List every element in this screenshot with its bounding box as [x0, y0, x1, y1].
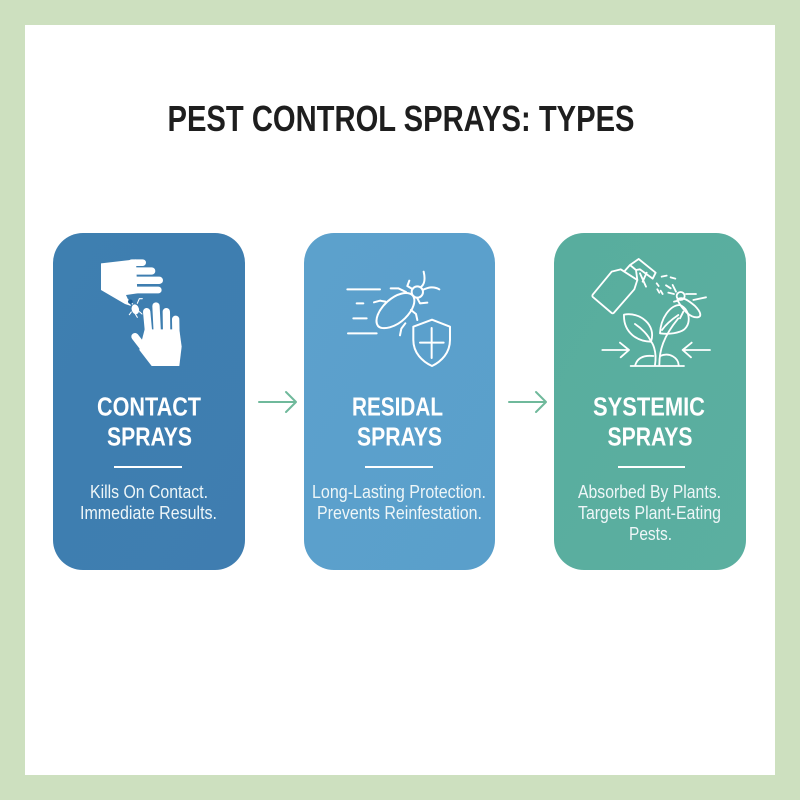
- icon: hands and pest: [101, 259, 182, 366]
- heading: systemic sprays: SYSTEMIC: [593, 392, 705, 422]
- heading: contact sprays: CONTACT: [97, 392, 201, 422]
- description: systemic sprays: Targets Plant-Eating: [578, 503, 721, 523]
- description: contact sprays: Immediate Results.: [80, 503, 217, 523]
- icon: spray bottle, pest and plant: [592, 259, 710, 366]
- description: contact sprays: Kills On Contact.: [90, 482, 208, 502]
- title: PEST CONTROL SPRAYS: TYPES: [168, 98, 634, 139]
- heading: systemic sprays: SPRAYS: [608, 422, 692, 452]
- heading: residal sprays: SPRAYS: [357, 422, 442, 452]
- description: residual sprays: Long-Lasting Protection.: [312, 482, 486, 502]
- heading: systemic sprays: [593, 392, 705, 452]
- panel: contact sprays: [53, 233, 245, 570]
- heading: contact sprays: [97, 392, 201, 452]
- arrow: contact to residual: [259, 392, 296, 412]
- heading: contact sprays: SPRAYS: [107, 422, 192, 452]
- description: residual sprays: Prevents Reinfestation.: [317, 503, 482, 523]
- panel: residual sprays: [304, 233, 495, 570]
- heading: residal sprays: RESIDAL: [352, 392, 443, 422]
- arrow: residual to systemic: [509, 392, 546, 412]
- description: systemic sprays: [578, 482, 721, 544]
- heading: residal sprays: [352, 392, 443, 452]
- panel: systemic sprays: [554, 233, 746, 570]
- description: residual sprays: [312, 482, 486, 523]
- description: contact sprays: [80, 482, 217, 523]
- icon: cockroach and shield: [347, 272, 450, 366]
- description: systemic sprays: Pests.: [629, 524, 672, 544]
- description: systemic sprays: Absorbed By Plants.: [578, 482, 721, 502]
